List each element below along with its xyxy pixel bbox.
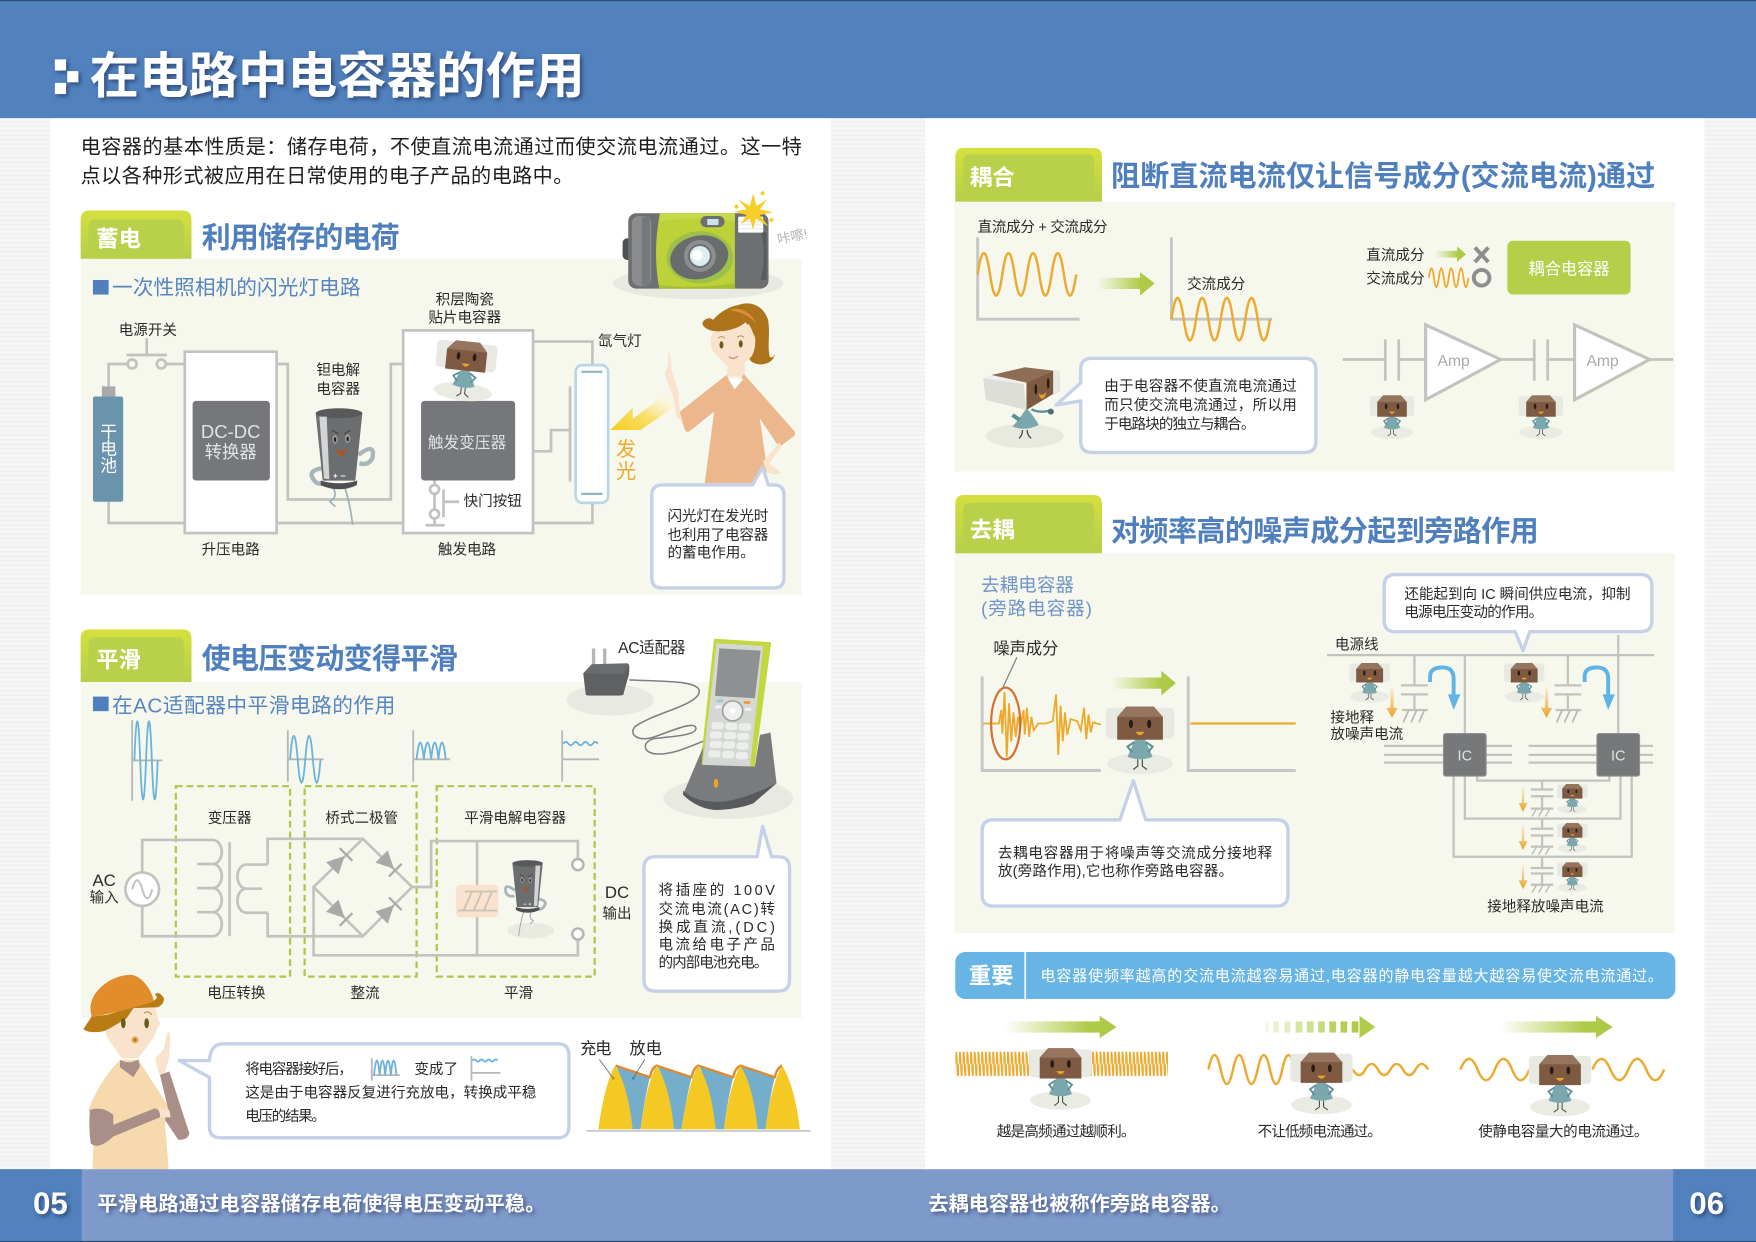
label: multilayer ceramic capacitor: 贴片电容器 [428, 310, 502, 327]
label: AC input: 输入 [90, 890, 119, 907]
waveform: smoothed DC [562, 730, 599, 782]
boost circuit box: DC-DC [201, 421, 260, 442]
callout: coupling: 于电路块的独立与耦合。 [1104, 416, 1255, 433]
graph: AC only [1171, 237, 1272, 340]
sound effect text: 咔嚓! [776, 225, 809, 247]
tab: 蓄电: 蓄电 [96, 226, 141, 251]
page number 06: 06 [1689, 1186, 1724, 1221]
callout: flash uses storage: 也利用了电容器 [667, 527, 769, 544]
graph: filtered signal [1188, 676, 1296, 771]
chart: charge and discharge: 充电 [580, 1040, 611, 1058]
icon: phone in cradle [663, 640, 793, 819]
icon: chip character network 4 [1557, 823, 1587, 853]
label: DC output: DC [605, 883, 629, 902]
label: trigger circuit: 触发电路 [438, 541, 497, 558]
xenon lamp [576, 365, 608, 503]
woman character [664, 303, 795, 483]
icon: decoupling chip character [1106, 707, 1174, 774]
example: large capacitance passes [1460, 1016, 1664, 1141]
icon: chip character [1290, 1053, 1353, 1114]
important bar: 重要 [969, 963, 1013, 988]
icon: chip character network 5 [1557, 862, 1587, 892]
label: ground noise current left: 接地释 [1330, 709, 1375, 726]
page number 05: 05 [33, 1186, 68, 1221]
label: AC input [90, 871, 119, 907]
icon: AC adapter [567, 648, 704, 754]
flash light bolt [610, 390, 676, 430]
label: decoupling capacitor: (旁路电容器) [981, 598, 1092, 619]
AC source and transformer [125, 839, 363, 936]
bridge diode [314, 839, 583, 955]
callout: AC to DC [644, 827, 790, 991]
waves [955, 1052, 1034, 1076]
callout: AC to DC: 电流给电子产品 [659, 937, 775, 954]
waveform: AC input [132, 720, 162, 801]
icon: chip character left [1370, 395, 1414, 439]
icon: chip character network 3 [1557, 784, 1587, 814]
icon: chip character [1029, 1048, 1092, 1110]
amplifier circuit [1343, 325, 1673, 400]
icon: chip character network 1 [1349, 663, 1390, 703]
label: AC adapter: AC适配器 [618, 639, 686, 657]
smoothing capacitor symbol [456, 885, 498, 917]
panel: decoupling 去耦 [954, 495, 1675, 933]
caption: 不让低频电流通过。 [1258, 1124, 1382, 1141]
callout: bypass [982, 781, 1288, 906]
callout: AC to DC: 的内部电池充电。 [659, 955, 768, 972]
label: power line: 电源线 [1335, 637, 1379, 654]
label: shutter button: 快门按钮 [464, 493, 522, 510]
heading: 对频率高的噪声成分起到旁路作用 [1111, 515, 1539, 548]
icon: title bullet squares [55, 59, 78, 94]
speech bubble: capacitor effect: 将电容器接好后， [245, 1061, 353, 1078]
footer note right: 去耦电容器也被称作旁路电容器。 [928, 1192, 1231, 1216]
tab: 去耦: 去耦 [970, 518, 1015, 543]
icon: tantalum capacitor character [312, 408, 373, 525]
boost circuit box: 转换器 [205, 442, 257, 462]
waveform: rectified [413, 730, 450, 782]
wires [109, 338, 592, 523]
boy character [83, 975, 189, 1169]
label: multilayer ceramic capacitor [428, 292, 502, 327]
label: DC output: 输出 [603, 905, 632, 922]
heading: 阻断直流电流仅让信号成分(交流电流)通过 [1111, 160, 1655, 193]
callout: coupling [1056, 358, 1316, 452]
amplifier circuit: Amp [1438, 353, 1470, 370]
label: tantalum capacitor [316, 362, 360, 398]
IC chip right: IC [1611, 748, 1626, 764]
circuit labels: 变压器 [208, 810, 252, 827]
legend: DC blocked, AC passes: 直流成分 [1366, 247, 1425, 264]
label: ground noise current left [1330, 709, 1404, 743]
label: flash [616, 438, 636, 483]
label: ground noise current bottom: 接地释放噪声电流 [1487, 898, 1604, 916]
speech bubble: capacitor effect: 这是由于电容器反复进行充放电，转换成平稳 [245, 1084, 536, 1102]
battery: 池 [100, 456, 117, 475]
label: decoupling capacitor: 去耦电容器 [981, 574, 1074, 595]
callout: IC supply [1384, 575, 1652, 651]
circuit labels: 电压转换 [207, 985, 266, 1002]
chart: charge and discharge: 放电 [629, 1040, 662, 1058]
speech bubble: capacitor effect: 变成了 [414, 1061, 458, 1078]
subheading: 一次性照相机的闪光灯电路 [112, 277, 361, 300]
mini waveform: rectified [372, 1058, 400, 1081]
circuit labels: 桥式二极管 [325, 810, 398, 827]
label: DC output [603, 883, 632, 922]
icon: chip character network 2 [1504, 663, 1544, 703]
legend: DC blocked, AC passes: 交流成分 [1366, 269, 1425, 287]
panel: smoothing 平滑 [81, 629, 802, 1018]
icon: large chip character [983, 367, 1064, 448]
callout: bypass: 去耦电容器用于将噪声等交流成分接地释 [998, 844, 1273, 862]
label: flash: 光 [616, 460, 636, 483]
graph: AC only: 交流成分 [1187, 275, 1245, 293]
icon: chip capacitor character [432, 338, 498, 404]
icon: camera [613, 213, 784, 299]
tab: 平滑 [81, 629, 192, 682]
arrow dashed [1265, 1016, 1375, 1038]
circuit labels: 整流 [351, 985, 380, 1002]
caption: 使静电容量大的电流通过。 [1478, 1124, 1648, 1141]
speech bubble: capacitor effect [179, 1044, 569, 1138]
trigger circuit box [403, 330, 533, 533]
intro text: 点以各种形式被应用在日常使用的电子产品的电路中。 [81, 165, 573, 188]
important bar: 电容器使频率越高的交流电流越容易通过,电容器的静电容量越大越容易使交流电流通过。 [1040, 967, 1663, 985]
button: coupling capacitor [1507, 241, 1631, 295]
label: flash: 发 [616, 438, 636, 461]
tab: 蓄电 [81, 211, 192, 259]
legend: DC blocked, AC passes [1366, 246, 1489, 287]
trigger circuit box: 触发变压器 [428, 434, 506, 452]
boost circuit box [185, 352, 277, 533]
heading: 使电压变动变得平滑 [202, 643, 458, 676]
blue current arrows [1430, 667, 1615, 710]
callout: flash uses storage: 闪光灯在发光时 [667, 508, 768, 525]
label: boost circuit: 升压电路 [202, 541, 260, 558]
label: noise: 噪声成分 [993, 640, 1058, 658]
label: tantalum capacitor: 钽电解 [316, 362, 360, 379]
battery: 干 [100, 423, 117, 442]
label: DC + AC: 直流成分 + 交流成分 [978, 218, 1108, 236]
label: power switch: 电源开关 [119, 322, 177, 339]
amplifier circuit: Amp [1586, 353, 1619, 370]
callout: IC supply: 电源电压变动的作用。 [1404, 604, 1543, 621]
intro text: 电容器的基本性质是：储存电荷，不使直流电流通过而使交流电流通过。这一特 [81, 135, 802, 158]
caption: 越是高频通过越顺利。 [997, 1124, 1136, 1141]
panel background [81, 682, 802, 1018]
example: high frequency passes [955, 1016, 1168, 1141]
label: ground noise current left: 放噪声电流 [1330, 725, 1404, 743]
waves [1208, 1055, 1295, 1084]
tab: 耦合 [955, 148, 1102, 202]
mini waveform: smoothed [471, 1056, 501, 1081]
panel background [81, 259, 802, 595]
circuit labels [207, 810, 567, 1002]
IC chip left: IC [1458, 748, 1472, 764]
callout: coupling: 而只使交流电流通过，所以用 [1104, 396, 1297, 414]
shutter button [426, 480, 459, 525]
circuit labels: 平滑 [504, 985, 533, 1002]
callout: flash uses storage: 的蓄电作用。 [667, 545, 755, 562]
waveform: transformed AC [288, 730, 324, 783]
chart: charge and discharge [580, 1040, 811, 1131]
waves [1460, 1059, 1664, 1080]
graph: DC plus AC [978, 237, 1080, 319]
subheading: 在AC适配器中平滑电路的作用 [112, 694, 395, 717]
label: multilayer ceramic capacitor: 积层陶瓷 [436, 292, 494, 309]
callout: AC to DC: 交流电流(AC)转 [659, 900, 775, 918]
graph: noisy signal [982, 657, 1101, 771]
panel background [954, 553, 1675, 933]
speech bubble: capacitor effect: 电压的结果。 [245, 1108, 326, 1125]
intro text [81, 135, 802, 188]
important bar [955, 952, 1675, 999]
tab: 平滑: 平滑 [96, 647, 141, 672]
tab: 耦合: 耦合 [970, 165, 1015, 190]
button: coupling capacitor: 耦合电容器 [1528, 260, 1610, 278]
battery: 电 [100, 440, 117, 459]
arrow [1098, 272, 1155, 296]
panel: coupling 耦合 [954, 148, 1675, 471]
example: low frequency blocked [1208, 1016, 1428, 1141]
icon: camera flash star [734, 191, 774, 230]
panel background [954, 202, 1675, 471]
arrow [1005, 1016, 1117, 1038]
arrow [1111, 671, 1176, 695]
label: decoupling capacitor [981, 574, 1092, 619]
callout: AC to DC: 换成直流,(DC) [659, 919, 775, 936]
heading: 利用储存的电荷 [202, 222, 400, 255]
label: AC input: AC [92, 871, 116, 890]
arrow [1501, 1016, 1613, 1038]
tab: 去耦 [955, 495, 1102, 553]
orange noise arrows [1386, 688, 1552, 889]
IC chip right [1597, 734, 1640, 776]
dashed regions [176, 786, 595, 977]
icon: electrolytic capacitor character [505, 860, 554, 938]
header band [0, 0, 1756, 118]
IC power network [1327, 635, 1654, 893]
icon: chip character [1529, 1055, 1591, 1116]
callout: coupling: 由于电容器不使直流电流通过 [1104, 378, 1297, 395]
battery [93, 386, 123, 502]
callout: flash uses storage [652, 467, 784, 588]
panel: storage 蓄电 [81, 191, 809, 595]
icon: chip character right [1519, 395, 1563, 439]
circuit labels: 平滑电解电容器 [464, 810, 567, 827]
callout: IC supply: 还能起到向 IC 瞬间供应电流，抑制 [1404, 585, 1631, 603]
title: 在电路中电容器的作用 [90, 49, 585, 104]
label: tantalum capacitor: 电容器 [316, 381, 360, 398]
callout: bypass: 放(旁路作用),它也称作旁路电容器。 [998, 862, 1233, 880]
footer band [0, 1169, 1756, 1242]
IC chip left [1444, 734, 1486, 776]
callout: AC to DC: 将插座的 100V [659, 882, 775, 899]
label: xenon lamp: 氙气灯 [598, 333, 642, 350]
footer note left: 平滑电路通过电容器储存电荷使得电压变动平稳。 [97, 1192, 545, 1216]
